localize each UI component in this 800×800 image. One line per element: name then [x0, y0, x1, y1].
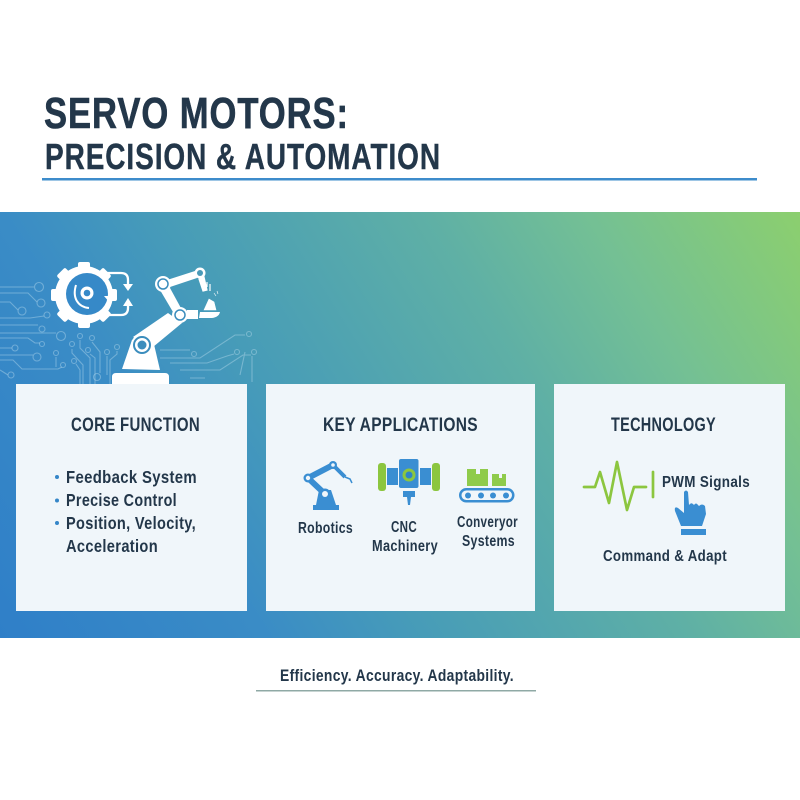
heading: technology: TECHNOLOGY — [611, 414, 716, 436]
circuit background pattern — [0, 282, 256, 384]
label: command and adapt: Command & Adapt — [603, 548, 727, 565]
heading: key applications: KEY APPLICATIONS — [323, 414, 478, 436]
label: CNC machinery — [372, 519, 438, 555]
list: core function items: Feedback System — [66, 467, 197, 487]
icon: waveform — [584, 462, 653, 510]
icon: CNC machine — [378, 459, 440, 505]
panel: core function — [16, 384, 247, 611]
label: conveyor systems: Systems — [462, 533, 515, 550]
list: core function items: Precise Control — [66, 490, 177, 510]
icon: pointing hand — [675, 490, 706, 535]
label: PWM signals: PWM Signals — [662, 474, 750, 491]
panel: technology — [554, 384, 785, 611]
list: core function items: Position, Velocity, — [66, 513, 196, 533]
label: CNC machinery: CNC — [391, 519, 417, 536]
icon: conveyor — [460, 469, 513, 501]
label: conveyor systems — [457, 514, 518, 550]
label: robotics: Robotics — [298, 520, 353, 537]
title — [44, 89, 441, 177]
heading: core function: CORE FUNCTION — [71, 414, 200, 436]
list: core function items: Acceleration — [66, 536, 158, 556]
tagline underline — [256, 690, 536, 692]
list: core function items — [55, 467, 197, 556]
tagline: Efficiency. Accuracy. Adaptability. — [280, 667, 514, 685]
title: SERVO MOTORS: — [44, 89, 349, 138]
label: CNC machinery: Machinery — [372, 538, 438, 555]
icon: robotics arm — [304, 461, 352, 510]
icon: robot arm — [112, 268, 220, 384]
title underline — [42, 178, 757, 180]
icon: gear with feedback arrows — [51, 262, 133, 328]
panel: key applications — [266, 384, 535, 611]
gradient band — [0, 212, 800, 638]
label: conveyor systems: Converyor — [457, 514, 518, 531]
title: PRECISION & AUTOMATION — [45, 136, 441, 177]
